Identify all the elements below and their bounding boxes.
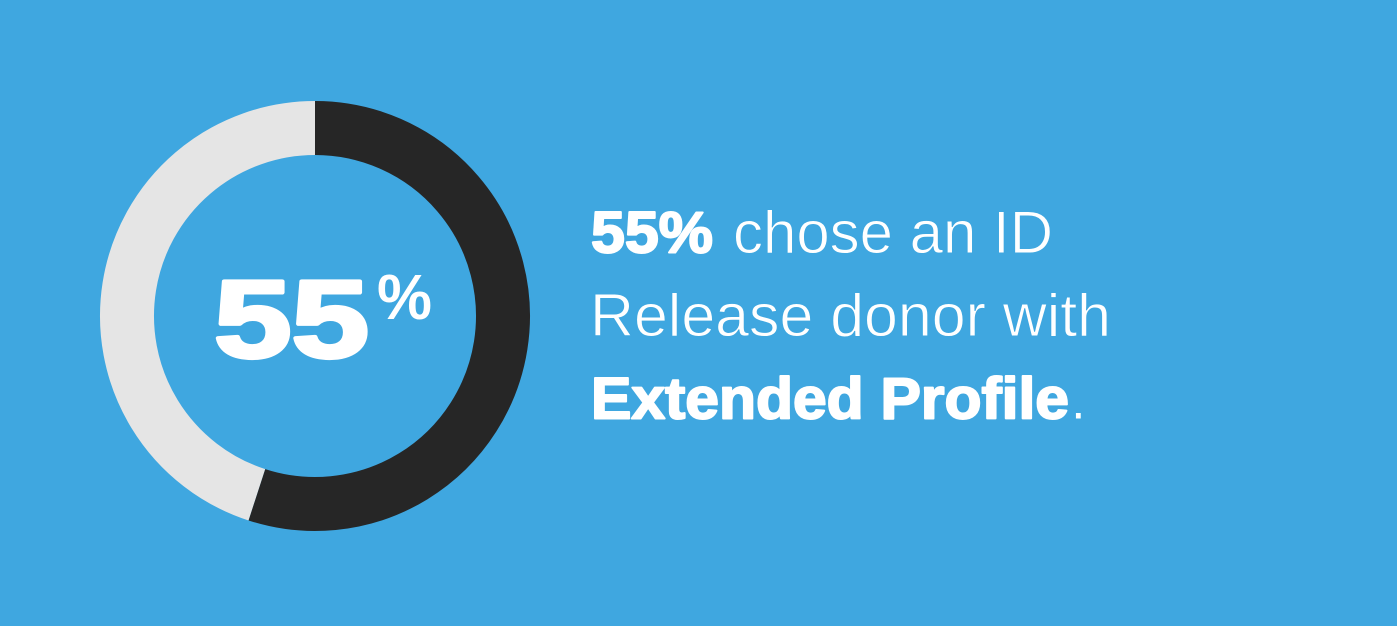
statement text: chose an ID	[733, 199, 1053, 266]
statement text: .	[1070, 365, 1087, 432]
donut center value	[214, 258, 432, 381]
statement text	[590, 199, 1111, 432]
statement text: 55%	[591, 200, 713, 266]
donut remainder segment	[127, 128, 315, 495]
donut center value: %	[377, 261, 432, 333]
donut chart: 55 percent	[127, 128, 503, 504]
statement text: Release donor with	[590, 282, 1111, 349]
donut 55 percent segment	[257, 128, 503, 504]
donut center value: 55	[214, 258, 369, 381]
statement text: Extended Profile	[591, 366, 1069, 432]
